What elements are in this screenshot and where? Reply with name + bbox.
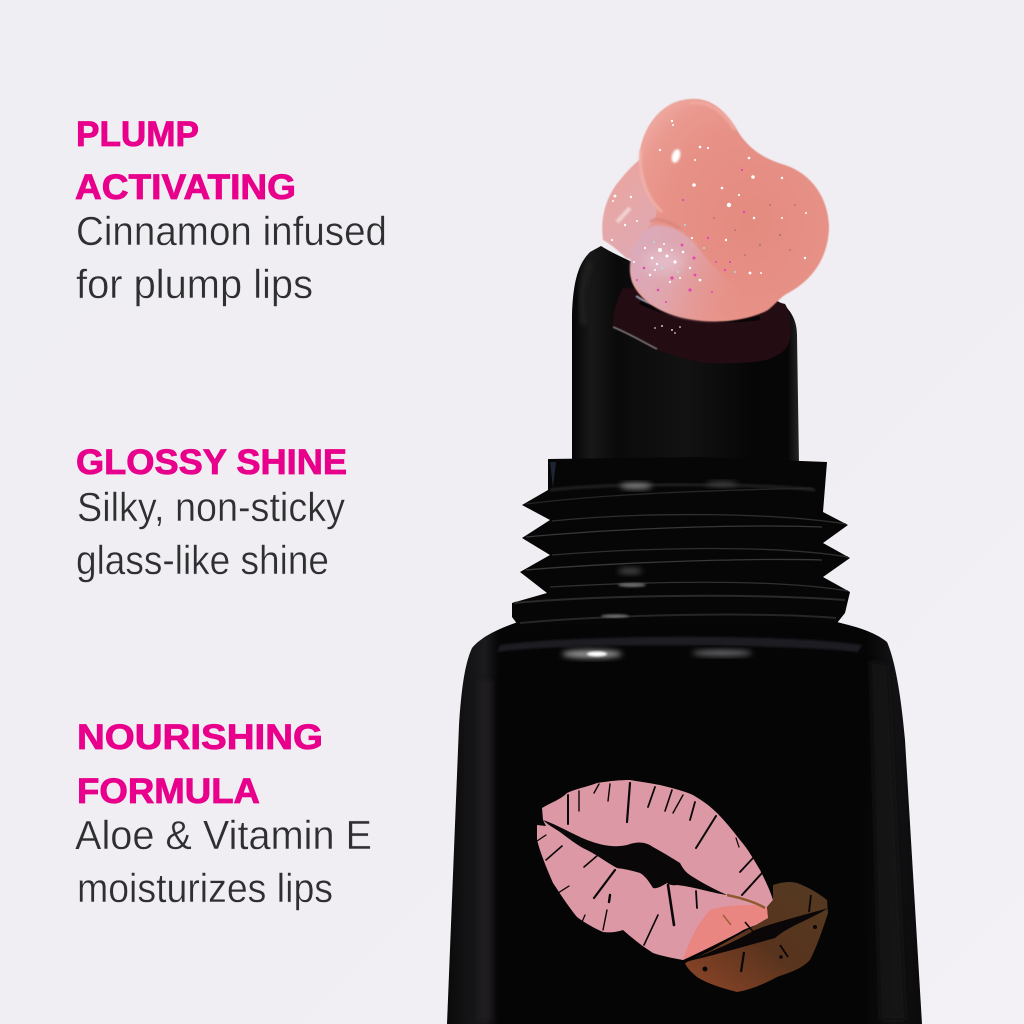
- gloss blob: [602, 99, 829, 334]
- heading: plump activating: [75, 115, 296, 207]
- heading: glossy shine: GLOSSY SHINE: [76, 443, 347, 482]
- heading: nourishing formula: [77, 718, 323, 811]
- second kiss overlap: [683, 882, 828, 992]
- main lobe: [630, 99, 829, 322]
- lip creases: [537, 783, 762, 945]
- mouth opening: [543, 820, 727, 895]
- fold highlights: [640, 150, 662, 212]
- lower glitter lobe: [630, 225, 770, 322]
- description: aloe and vitamin e: moisturizes lips: [77, 865, 333, 911]
- text block: nourishing formula: [75, 718, 372, 911]
- threaded collar: [512, 457, 850, 625]
- description: cinnamon: Cinnamon infused: [76, 208, 387, 254]
- description: aloe and vitamin e: [75, 812, 372, 911]
- tip opening: [613, 288, 791, 363]
- heading: nourishing formula: NOURISHING: [77, 718, 323, 757]
- description: cinnamon: [76, 208, 387, 307]
- heading: nourishing formula: FORMULA: [77, 772, 260, 811]
- applicator tip: [572, 246, 799, 464]
- tube body: [447, 622, 922, 1024]
- back lobe: [602, 158, 672, 262]
- heading: plump activating: PLUMP: [76, 115, 199, 154]
- description: aloe and vitamin e: Aloe & Vitamin E: [75, 812, 372, 858]
- glitter on tip opening: [654, 325, 681, 334]
- product: lip gloss tube: [447, 99, 922, 1024]
- glitter sparkles: [611, 120, 807, 283]
- text block: glossy shine: [76, 443, 347, 583]
- text block: plump activating: [75, 115, 387, 307]
- icon: pink kiss print: [537, 780, 828, 992]
- heading: plump activating: ACTIVATING: [75, 168, 296, 207]
- description: cinnamon: for plump lips: [76, 261, 313, 307]
- description: shine: [76, 484, 345, 583]
- description: shine: Silky, non-sticky: [77, 484, 345, 530]
- description: shine: glass-like shine: [76, 537, 329, 583]
